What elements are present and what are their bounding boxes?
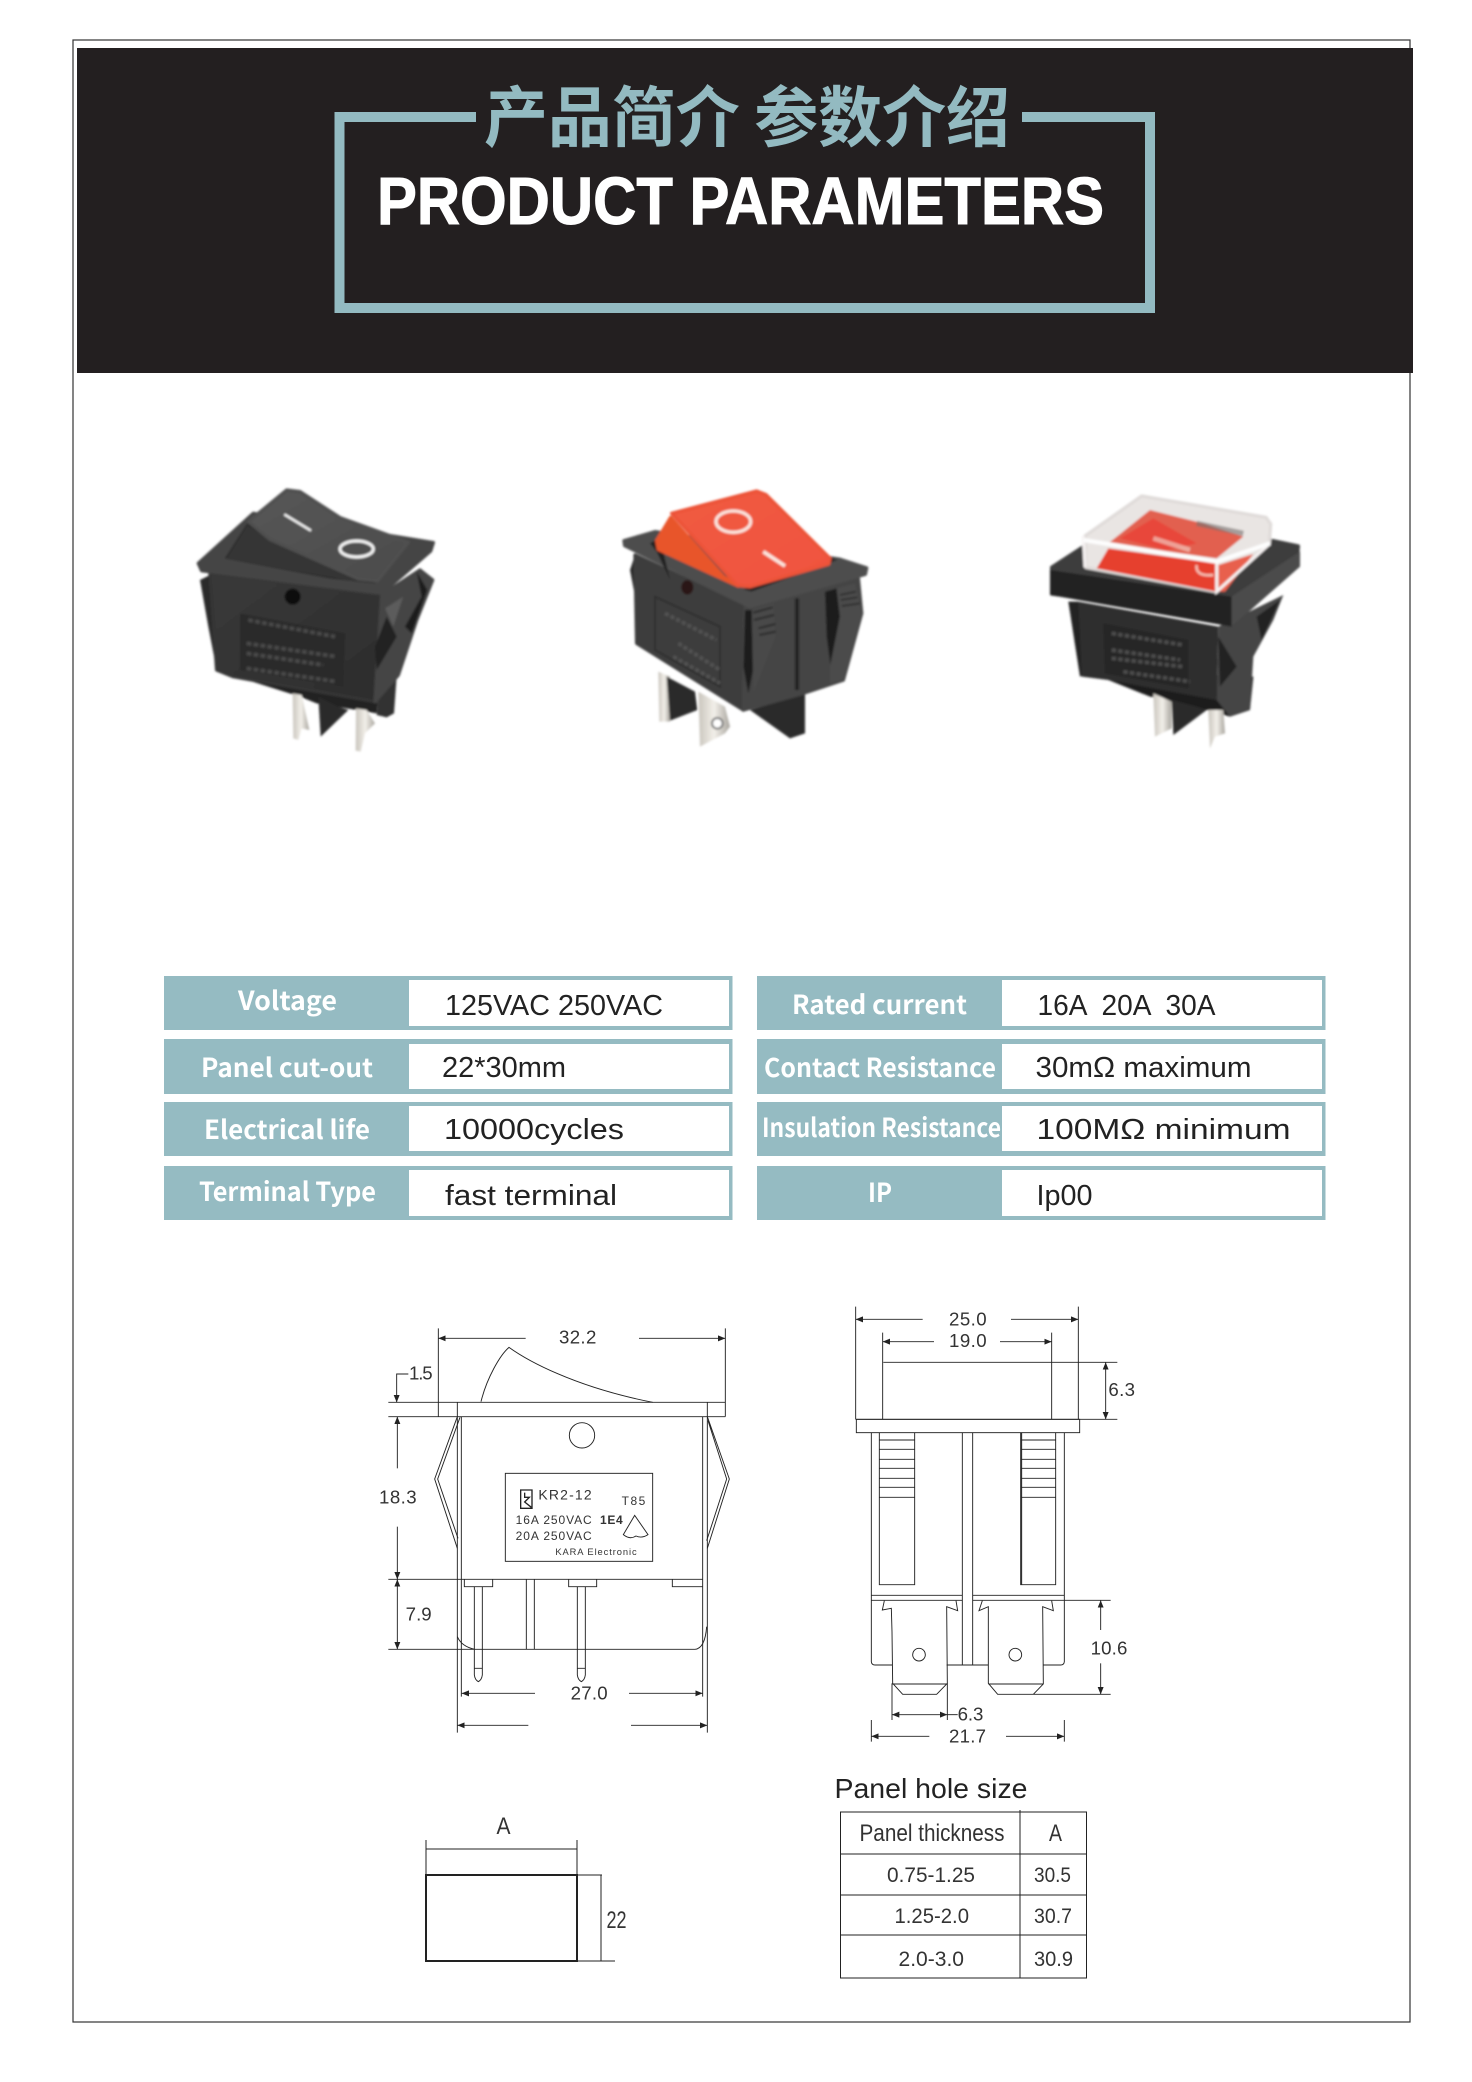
product label plate: T85 [622, 1494, 646, 1508]
panel hole size heading: Panel hole size [834, 1773, 1028, 1804]
row: Panel cut-out [164, 1039, 732, 1094]
row: Terminal Type [164, 1166, 732, 1220]
panel hole size table: 30.7 [1034, 1904, 1072, 1928]
product label plate: KARA Electronic [555, 1547, 637, 1557]
panel hole size table [840, 1810, 1086, 1978]
label: A: A [496, 1813, 510, 1840]
row: Voltage: 125VAC 250VAC [445, 990, 663, 1022]
label: 22: 22 [606, 1907, 626, 1934]
product label plate: 20A 250VAC [516, 1529, 592, 1543]
panel cut-out diagram [426, 1813, 626, 1961]
panel hole size table: 2.0-3.0 [898, 1947, 964, 1971]
dimension labels: 25.0 [949, 1308, 987, 1329]
dimension arrows [856, 1319, 1106, 1736]
header banner [77, 48, 1413, 373]
spec table: left column [164, 976, 732, 1220]
dimension labels: 27.0 [571, 1682, 608, 1703]
dimension labels: 19.0 [949, 1330, 987, 1351]
icon: brand logo [521, 1490, 532, 1508]
row: Terminal Type: Terminal Type [199, 1172, 376, 1209]
spec table: right column [757, 976, 1326, 1220]
header outline frame [340, 117, 1150, 308]
dimension labels: 32.2 [559, 1327, 596, 1348]
row: Insulation Resistance [757, 1102, 1326, 1156]
product label plate: 16A 250VAC [516, 1513, 592, 1527]
technical drawing: side view [856, 1307, 1135, 1746]
dimension labels: 21.7 [949, 1725, 986, 1746]
title: Chinese: 产品简介 参数介绍 [484, 65, 1010, 161]
dimension labels: 10.6 [1091, 1637, 1127, 1658]
product label plate: 1E4 [600, 1513, 623, 1527]
row: Electrical life [164, 1102, 732, 1156]
row: Voltage [164, 976, 732, 1030]
row: IP: IP [868, 1173, 892, 1210]
terminal holes [913, 1648, 1022, 1661]
dimension labels [379, 1327, 608, 1703]
row: Panel cut-out: Panel cut-out [201, 1048, 373, 1085]
dimension labels: 7.9 [406, 1604, 432, 1625]
dimension labels: 6.3 [958, 1704, 983, 1725]
row: Rated current [757, 976, 1326, 1030]
row: Contact Resistance: Contact Resistance [764, 1048, 996, 1085]
product label plate [505, 1473, 653, 1561]
row: Contact Resistance: 30mΩ maximum [1036, 1052, 1252, 1084]
product photo: red rocker switch [624, 491, 867, 747]
panel hole size table: Panel thickness [860, 1820, 1004, 1847]
product photo: switch with clear cover [1050, 496, 1300, 748]
row: Terminal Type: fast terminal [445, 1180, 617, 1212]
row: Rated current: Rated current [792, 985, 967, 1022]
dimension labels: 1.5 [409, 1362, 433, 1383]
row: Electrical life: 10000cycles [444, 1114, 624, 1146]
product label plate: KR2-12 [538, 1486, 592, 1502]
panel hole size table: 0.75-1.25 [887, 1863, 975, 1887]
row: Electrical life: Electrical life [204, 1110, 370, 1147]
row: IP [757, 1166, 1326, 1220]
title: English: PRODUCT PARAMETERS [377, 164, 1104, 239]
technical drawing: front view [379, 1327, 729, 1733]
panel hole size table: A [1049, 1820, 1062, 1847]
row: IP: Ip00 [1036, 1180, 1092, 1212]
panel hole size table: 30.9 [1034, 1947, 1073, 1971]
dimension arrows [397, 1338, 725, 1725]
row: Insulation Resistance: 100MΩ minimum [1036, 1114, 1290, 1146]
dimension labels: 6.3 [1108, 1379, 1135, 1400]
row: Panel cut-out: 22*30mm [442, 1052, 566, 1084]
row: Rated current: 16A 20A 30A [1038, 990, 1216, 1022]
panel hole size table: 30.5 [1034, 1863, 1071, 1887]
dimension labels: 18.3 [379, 1487, 417, 1508]
hole in housing [569, 1423, 595, 1448]
product photo: black rocker switch [198, 490, 433, 752]
row: Voltage: Voltage [237, 981, 337, 1018]
row: Contact Resistance [757, 1039, 1326, 1094]
icon: certification mark [623, 1515, 648, 1538]
panel hole size table: 1.25-2.0 [894, 1904, 969, 1928]
dimension labels [949, 1308, 1135, 1746]
row: Insulation Resistance: Insulation Resistance [762, 1108, 1001, 1145]
